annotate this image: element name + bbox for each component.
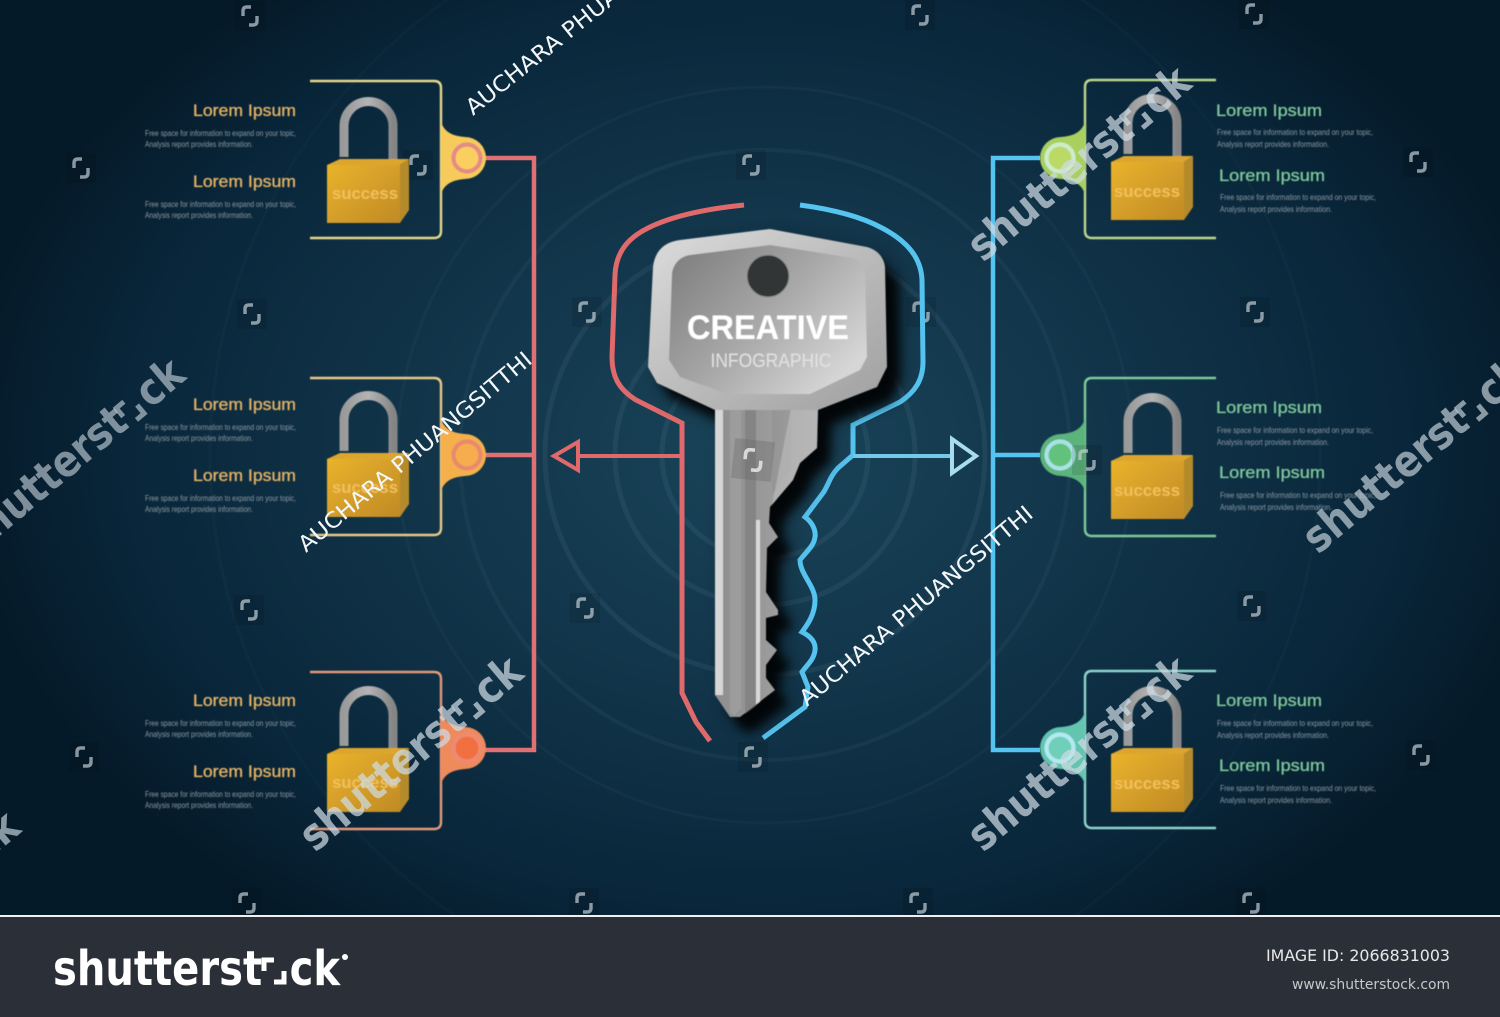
text: right top bbox=[1216, 101, 1376, 214]
text: right bottom: Free space for information to expand on your topic, bbox=[1220, 783, 1376, 793]
lock: right top bbox=[1111, 98, 1193, 220]
panel: right top bbox=[1040, 80, 1376, 238]
node: left bottom bbox=[441, 711, 486, 785]
text: right top: Analysis report provides information. bbox=[1217, 139, 1329, 149]
panel: left middle bbox=[145, 378, 486, 535]
text: left bottom: Analysis report provides information. bbox=[145, 800, 253, 810]
lock: left top: success bbox=[332, 184, 398, 203]
node: right top bbox=[1040, 121, 1085, 195]
lock: left bottom bbox=[327, 690, 409, 812]
text: right middle: Lorem Ipsum bbox=[1216, 398, 1322, 417]
shutterstock watermark: bottom left: shutterstock bbox=[289, 645, 534, 861]
panel: right bottom bbox=[1040, 671, 1376, 828]
text: right middle bbox=[1216, 398, 1376, 512]
text: left top: Analysis report provides information. bbox=[145, 139, 253, 149]
key shadow bbox=[660, 239, 900, 731]
shutterstock watermark: top right: shutterstock bbox=[957, 55, 1202, 271]
text: right bottom: Lorem Ipsum bbox=[1219, 756, 1325, 775]
text: right middle: Analysis report provides information. bbox=[1220, 502, 1332, 512]
panel: left top bbox=[145, 81, 486, 238]
text: left top: Analysis report provides information. bbox=[145, 210, 253, 220]
text: right bottom: Analysis report provides information. bbox=[1220, 795, 1332, 805]
text: left top bbox=[145, 101, 296, 220]
blue key outline bbox=[763, 205, 923, 738]
footer bar bbox=[0, 915, 1500, 1017]
lock: right middle bbox=[1111, 398, 1193, 519]
lock: right bottom bbox=[1111, 690, 1193, 812]
key watermark square bbox=[731, 438, 775, 482]
text: right middle: Analysis report provides information. bbox=[1217, 437, 1329, 447]
node: left middle bbox=[441, 418, 486, 492]
text: left top: Free space for information to expand on your topic, bbox=[145, 128, 296, 138]
lock: left middle: success bbox=[332, 478, 398, 497]
text: left top: Lorem Ipsum bbox=[193, 172, 296, 191]
panel: left bottom bbox=[145, 672, 486, 829]
text: left middle: Analysis report provides information. bbox=[145, 504, 253, 514]
text: right bottom bbox=[1216, 691, 1376, 805]
text: left bottom bbox=[145, 691, 296, 810]
text: left middle: Analysis report provides information. bbox=[145, 433, 253, 443]
node: right middle bbox=[1040, 418, 1085, 492]
key bbox=[648, 229, 887, 717]
footer url: www.shutterstock.com bbox=[1292, 977, 1450, 993]
key plate bbox=[669, 245, 867, 394]
text: left middle bbox=[145, 395, 296, 514]
footer logo: shutterstock bbox=[53, 941, 341, 997]
text: right top: Lorem Ipsum bbox=[1216, 101, 1322, 120]
left arrow bbox=[554, 442, 682, 470]
text: right top: Lorem Ipsum bbox=[1219, 166, 1325, 185]
text: left middle: Lorem Ipsum bbox=[193, 395, 296, 414]
text: right top: Analysis report provides information. bbox=[1220, 204, 1332, 214]
text: left bottom: Analysis report provides information. bbox=[145, 729, 253, 739]
text: left bottom: Free space for information to expand on your topic, bbox=[145, 789, 296, 799]
key head bbox=[648, 229, 887, 410]
lock: right top: success bbox=[1114, 182, 1180, 201]
footer image id: IMAGE ID: 2066831003 bbox=[1266, 946, 1450, 965]
text: left middle: Lorem Ipsum bbox=[193, 466, 296, 485]
author watermark: middle left: AUCHARA PHUANGSITTHI bbox=[294, 348, 537, 558]
lock: right middle: success bbox=[1114, 481, 1180, 500]
text: left top: Free space for information to expand on your topic, bbox=[145, 199, 296, 209]
text: right middle: Free space for information to expand on your topic, bbox=[1217, 425, 1373, 435]
text: right middle: Lorem Ipsum bbox=[1219, 463, 1325, 482]
panel: right middle bbox=[1040, 378, 1376, 536]
text: left top: Lorem Ipsum bbox=[193, 101, 296, 120]
text: left bottom: Lorem Ipsum bbox=[193, 691, 296, 710]
text: right bottom: Free space for information to expand on your topic, bbox=[1217, 718, 1373, 728]
node: left top bbox=[441, 121, 486, 195]
author watermark: middle right: AUCHARA PHUANGSITTHI bbox=[795, 502, 1038, 712]
text: right bottom: Lorem Ipsum bbox=[1216, 691, 1322, 710]
text: left middle: Free space for information to expand on your topic, bbox=[145, 493, 296, 503]
small mark over right middle node bbox=[1072, 445, 1102, 475]
subtitle: infographic: INFOGRAPHIC bbox=[710, 351, 832, 372]
text: right bottom: Analysis report provides information. bbox=[1217, 730, 1329, 740]
lock: right bottom: success bbox=[1114, 774, 1180, 793]
text: left bottom: Lorem Ipsum bbox=[193, 762, 296, 781]
text: right top: Free space for information to expand on your topic, bbox=[1220, 192, 1376, 202]
key hole bbox=[747, 255, 789, 297]
text: right middle: Free space for information to expand on your topic, bbox=[1220, 490, 1376, 500]
lock: left bottom: success bbox=[332, 773, 398, 792]
node: right bottom bbox=[1040, 711, 1085, 785]
shutterstock watermark: bottom right: shutterstock bbox=[957, 645, 1202, 861]
text: left bottom: Free space for information to expand on your topic, bbox=[145, 718, 296, 728]
lock: left middle bbox=[327, 396, 409, 517]
concentric rings bbox=[210, 0, 1320, 1010]
lock: left top bbox=[327, 102, 409, 223]
title: creative: CREATIVE bbox=[687, 309, 849, 347]
red connector bus bbox=[484, 158, 534, 750]
red key outline bbox=[612, 205, 744, 741]
text: right top: Free space for information to expand on your topic, bbox=[1217, 127, 1373, 137]
blue connector bus bbox=[993, 158, 1040, 750]
text: left middle: Free space for information to expand on your topic, bbox=[145, 422, 296, 432]
right arrow bbox=[853, 439, 976, 473]
key blade bbox=[715, 408, 818, 717]
